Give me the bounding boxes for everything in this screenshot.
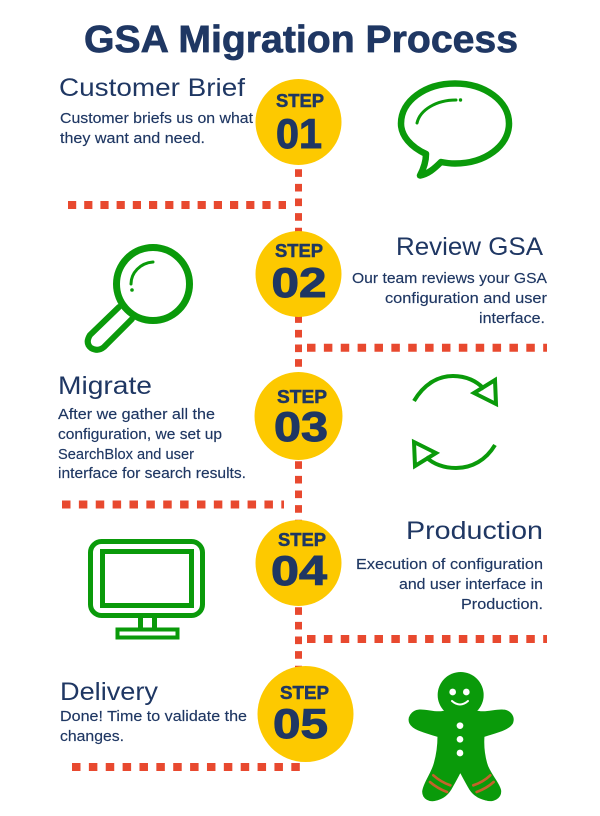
step 3 text block: Migrate [58, 372, 152, 400]
step 5 text block [60, 678, 247, 745]
step 3 badge [254, 372, 342, 460]
icon: speech bubble [401, 84, 509, 176]
step 4 badge [256, 520, 342, 606]
step 4 badge: STEP [278, 529, 326, 550]
dotted divider 4 [307, 635, 547, 643]
step 5 text block: Done! Time to validate the [60, 709, 247, 725]
step 3 text block [58, 372, 246, 482]
step 1 badge [256, 79, 342, 165]
dotted divider 3 [62, 500, 284, 508]
step 3 text block: After we gather all the [58, 407, 215, 423]
step 1 text block [59, 74, 253, 147]
step 5 badge [258, 666, 354, 762]
step 1 text block: they want and need. [60, 131, 205, 147]
step 2 text block: Review GSA [396, 233, 543, 261]
dotted divider 5 [72, 763, 300, 771]
step 1 badge: 01 [276, 110, 322, 157]
step 2 text block [352, 233, 547, 327]
step 4 badge: 04 [271, 547, 327, 594]
step 4 text block: and user interface in [399, 577, 543, 593]
step 5 text block: changes. [60, 729, 124, 745]
step 3 text block: configuration, we set up [58, 427, 222, 443]
dotted divider 2 [307, 344, 547, 352]
step 2 text block: configuration and user [385, 291, 547, 307]
step 2 badge [256, 231, 342, 317]
title: GSA Migration Process [84, 19, 518, 61]
dotted divider 1 [68, 201, 286, 209]
step 2 text block: Our team reviews your GSA [352, 271, 547, 287]
step 1 text block: Customer briefs us on what [60, 111, 253, 127]
icon: magnifying glass [88, 248, 190, 350]
step 4 text block: Execution of configuration [356, 557, 543, 573]
step 4 text block: Production. [461, 597, 543, 613]
icon: monitor [90, 542, 202, 638]
step 4 text block: Production [406, 517, 543, 545]
step 5 text block: Delivery [60, 678, 159, 706]
step 3 text block: SearchBlox and user [58, 447, 194, 463]
step 1 text block: Customer Brief [59, 74, 245, 102]
step 5 badge: STEP [280, 682, 329, 703]
step 2 badge: 02 [272, 259, 326, 306]
step 5 badge: 05 [273, 700, 328, 747]
step 1 badge: STEP [276, 90, 324, 111]
step 3 badge: 03 [274, 403, 328, 450]
step 4 text block [356, 517, 543, 613]
step 2 badge: STEP [275, 240, 323, 261]
step 2 text block: interface. [479, 311, 545, 327]
step 3 text block: interface for search results. [58, 466, 246, 482]
icon: refresh arrows [414, 376, 496, 468]
icon: gingerbread man [410, 672, 512, 800]
vertical dotted connector [295, 169, 302, 668]
step 3 badge: STEP [277, 386, 327, 407]
